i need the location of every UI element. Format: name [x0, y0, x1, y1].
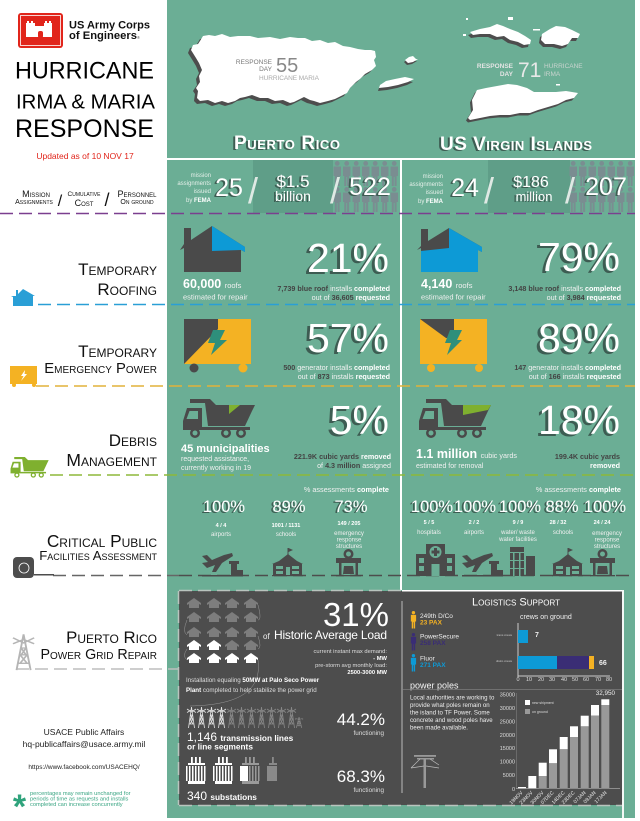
- panel: USVI facilities assessment: 100%: [499, 498, 541, 516]
- section label: Puerto Rico Power Grid Repair: [40, 628, 157, 663]
- section label: Critical Public Facilities Assessment: Facilities Assessment: [39, 548, 158, 563]
- row labels: mission, cost, personnel: On ground: [120, 199, 154, 206]
- panel: USVI debris: 1.1 million cubic yards: [416, 447, 517, 461]
- heading: US Virgin Islands: US Virgin Islands: [440, 134, 592, 155]
- icon: transmission tower: [13, 634, 34, 670]
- panel: USVI facilities assessment: response: [595, 538, 620, 544]
- title: IRMA & MARIA: [16, 90, 155, 114]
- panel: PR roofing: estimated for repair: [183, 292, 248, 302]
- legend: crews: Fluor: [420, 656, 436, 662]
- panel: PR generator: out of 873 installs requested: [298, 372, 390, 381]
- panel: USVI facilities assessment: structures: [594, 544, 620, 550]
- text: power poles description: concrete and wood poles have: [410, 717, 493, 724]
- section label: Temporary Emergency Power: Temporary: [78, 342, 157, 361]
- legend: crews: 23 PAX: [420, 620, 443, 626]
- panel: PR roofing: out of 36,605 requested: [312, 293, 390, 302]
- panel: USVI roofing: [417, 228, 621, 302]
- panel: USVI facilities assessment: 2 / 2: [469, 520, 479, 526]
- stats: Puerto Rico: issued: [194, 189, 211, 195]
- panel: USVI facilities assessment: 88%: [545, 498, 579, 516]
- bar chart: crews on ground: 30: [549, 677, 555, 683]
- bar chart: power poles: 23NOV: [519, 790, 535, 806]
- text: Palo Seco installation: Installation equaling 50MW at Palo Seco Power: [186, 677, 320, 684]
- bar chart: crews on ground: 80: [606, 677, 612, 683]
- stat: transmission lines: 1,146 transmission lines: [187, 730, 294, 744]
- stats: US Virgin Islands: /: [484, 170, 494, 211]
- heading: power poles: power poles: [410, 680, 459, 690]
- text: power poles description: Local authorities are working to: [410, 694, 495, 702]
- panel: PR generator: 500 generator installs completed: [283, 363, 390, 372]
- footnote: periods of time as requests and installs: [30, 796, 128, 802]
- panel: USVI facilities assessment: emergency: [592, 531, 622, 537]
- text: power poles description: [410, 694, 495, 732]
- panel: PR debris: of 4.3 million assigned: [317, 461, 391, 470]
- icon grid: houses with power: [184, 598, 260, 706]
- panel: USVI facilities assessment: % assessments complete: [536, 485, 621, 494]
- panel: USVI facilities assessment: 100%: [454, 498, 496, 516]
- bar chart: power poles: new shipment: [532, 701, 554, 705]
- panel: USVI facilities assessment: hospitals: [417, 530, 441, 536]
- footnote: completed can increase concurrently: [30, 802, 123, 808]
- title: [15, 58, 155, 143]
- panel: PR facilities assessment: 4 / 4: [216, 523, 227, 529]
- panel: USVI facilities assessment: 5 / 5: [424, 520, 434, 526]
- bar chart: crews on ground: crews on ground: [520, 614, 572, 621]
- panel: USVI facilities assessment: 100%: [584, 498, 626, 516]
- stats: Puerto Rico: billion: [275, 188, 311, 204]
- panel: PR facilities assessment: airports: [211, 532, 231, 538]
- panel: PR roofing: [180, 226, 390, 302]
- section label: Debris Management: Management: [66, 450, 158, 470]
- map: Puerto Rico: HURRICANE MARIA: [259, 75, 320, 82]
- icon: utility pole: [411, 755, 439, 788]
- contact block: USACE Public Affairs: [44, 727, 124, 737]
- stat: historic average load: [263, 596, 389, 676]
- legend: crews: PowerSecure: [420, 634, 459, 640]
- map: Puerto Rico: DAY: [259, 66, 273, 73]
- title: RESPONSE: [15, 115, 154, 143]
- bar chart: power poles: [500, 690, 620, 806]
- panel: PR facilities assessment: [202, 485, 389, 576]
- stats: Puerto Rico: 25: [215, 174, 243, 202]
- row labels: mission, cost, personnel: Cost: [75, 198, 94, 208]
- panel: PR debris: 221.9K cubic yards removed: [294, 452, 391, 461]
- panel: USVI debris: [416, 397, 620, 470]
- bar chart: crews on ground: distro crews: [496, 659, 512, 663]
- section label: Temporary Roofing: [78, 260, 157, 299]
- stats: Puerto Rico: /: [330, 170, 340, 211]
- panel: logistics support: [402, 590, 624, 818]
- panel: USVI facilities assessment: 100%: [411, 498, 453, 516]
- panel: USVI generator: 147 generator installs completed: [514, 363, 621, 372]
- panel: USVI facilities assessment: [411, 485, 626, 576]
- panel: PR facilities assessment: 89%: [272, 498, 306, 516]
- row labels: mission, cost, personnel: [15, 189, 157, 210]
- section label: Critical Public Facilities Assessment: Critical Public: [47, 531, 157, 551]
- contact block: https://www.facebook.com/USACEHQ/: [28, 764, 140, 771]
- panel: PR roofing: 60,000 roofs: [183, 277, 242, 291]
- row labels: mission, cost, personnel: /: [58, 193, 63, 210]
- panel: PR roofing: 7,739 blue roof installs completed: [277, 284, 390, 293]
- stats: US Virgin Islands: 207: [585, 173, 627, 201]
- stats: US Virgin Islands: by FEMA: [418, 199, 444, 205]
- stat: historic average load: Historic Average Load: [274, 628, 387, 642]
- bar chart: power poles: 15000: [500, 746, 515, 752]
- bar chart: power poles: 09JAN: [583, 790, 598, 805]
- row labels: mission, cost, personnel: /: [104, 190, 110, 210]
- panel: USVI roofing: out of 3,984 requested: [547, 293, 621, 302]
- panel: USVI facilities assessment: 9 / 9: [513, 520, 523, 526]
- map: Puerto Rico: [188, 34, 418, 106]
- bar chart: power poles: 17JAN: [594, 790, 609, 805]
- stat: historic average load: of: [263, 632, 270, 641]
- icon: tape measure: [13, 557, 54, 578]
- section label: Puerto Rico Power Grid Repair: Puerto Rico: [66, 628, 157, 647]
- legend: crews: 249th D/Co: [420, 613, 453, 620]
- bar chart: power poles: 35000: [500, 692, 515, 698]
- stat: historic average load: 2500-3000 MW: [347, 670, 388, 676]
- map: US Virgin Islands: 71: [518, 59, 541, 82]
- panel: USVI generator: out of 166 installs requested: [529, 372, 621, 381]
- bar chart: power poles: 30NOV: [530, 790, 546, 806]
- row labels: mission, cost, personnel: Mission: [22, 189, 50, 199]
- text: Palo Seco installation: Plant completed to help stabilize the power grid: [186, 687, 317, 694]
- bar chart: crews on ground: 50: [572, 677, 578, 683]
- legend: crews: 258 PAX: [420, 640, 446, 647]
- map: Puerto Rico: 55: [276, 55, 298, 77]
- stat: transmission lines: [187, 710, 385, 752]
- panel: PR roofing: 21%: [307, 235, 389, 281]
- bar chart: power poles: 25000: [500, 720, 515, 726]
- footnote: [13, 788, 131, 821]
- map: US Virgin Islands: RESPONSE: [477, 63, 514, 70]
- map: US Virgin Islands: [463, 17, 583, 122]
- bar chart: power poles: 07DEC: [540, 790, 556, 806]
- panel: USVI debris: 199.4K cubic yards: [555, 452, 620, 461]
- text: power poles description: provide what poles remain on: [410, 702, 490, 709]
- bar chart: power poles: 23DEC: [561, 790, 577, 806]
- stats: Puerto Rico: assignments: [177, 181, 211, 187]
- stats: Puerto Rico: $1.5: [276, 172, 310, 191]
- contact block: [23, 727, 145, 771]
- bar chart: crews on ground: trans crews: [497, 633, 512, 637]
- stats: US Virgin Islands: $186: [513, 174, 549, 191]
- panel: green background: [167, 0, 635, 818]
- panel: USVI roofing: 79%: [538, 234, 620, 280]
- icon: blue house: [11, 289, 35, 306]
- panel: USVI facilities assessment: water/ waste: [500, 530, 535, 536]
- text: power poles description: the island to TF Power. Some: [410, 710, 490, 716]
- map: US Virgin Islands: IRMA: [544, 71, 561, 78]
- map: US Virgin Islands: DAY: [500, 71, 514, 78]
- row labels: mission, cost, personnel: Personnel: [117, 189, 157, 199]
- panel: USVI debris: removed: [590, 461, 620, 470]
- stats: Puerto Rico: mission: [191, 173, 211, 179]
- panel: PR facilities assessment: % assessments complete: [304, 485, 389, 494]
- panel: USVI facilities assessment: airports: [464, 530, 484, 536]
- stats: US Virgin Islands: [409, 160, 634, 213]
- stats: US Virgin Islands: /: [565, 170, 575, 211]
- dashed separators: [0, 214, 635, 669]
- contact block: hq-publicaffairs@usace.army.mil: [23, 739, 145, 749]
- logo: US Army Corps of Engineers: [18, 13, 150, 48]
- bar chart: crews on ground: 10: [526, 677, 532, 683]
- bar chart: crews on ground: 60: [583, 677, 589, 683]
- bar chart: power poles: 07JAN: [573, 790, 588, 805]
- panel: PR facilities assessment: 149 / 205: [338, 521, 360, 527]
- text: Palo Seco installation: [186, 677, 320, 694]
- panel: USVI facilities assessment: 24 / 24: [594, 520, 611, 526]
- bar chart: power poles: 10000: [500, 760, 515, 766]
- bar chart: crews on ground: 66: [599, 660, 607, 667]
- bar chart: power poles: 14DEC: [551, 790, 567, 806]
- stat: substations: 340 substations: [187, 789, 257, 803]
- panel: PR debris: 45 municipalities: [181, 443, 270, 455]
- stats: US Virgin Islands: 24: [451, 174, 479, 202]
- map: Puerto Rico: RESPONSE: [236, 59, 273, 66]
- bar chart: power poles: 0: [512, 787, 515, 793]
- bar chart: crews on ground: 0: [516, 677, 520, 683]
- panel: USVI facilities assessment: water facilities: [498, 537, 537, 543]
- icon row: transmission towers: [187, 707, 303, 728]
- icon: green truck: [11, 457, 49, 478]
- bar chart: crews on ground: 70: [595, 677, 601, 683]
- legend: crews: 271 PAX: [420, 662, 446, 669]
- stat: historic average load: 31%: [323, 596, 389, 633]
- stats: Puerto Rico: by FEMA: [186, 198, 212, 204]
- stat: transmission lines: functioning: [354, 730, 384, 737]
- stat: transmission lines: 44.2%: [337, 710, 385, 729]
- panel: USVI roofing: 3,148 blue roof installs completed: [508, 284, 621, 293]
- section label: Debris Management: Debris: [109, 431, 157, 450]
- panel: logistics support: Logistics Support: [472, 596, 560, 608]
- section label: Temporary Emergency Power: Emergency Power: [44, 361, 157, 377]
- logo: US Army Corps of Engineers: US Army Corps: [69, 20, 150, 32]
- bar chart: power poles: 20000: [500, 733, 515, 739]
- panel: USVI generator: 89%: [538, 315, 620, 361]
- section label: Temporary Roofing: Temporary: [78, 260, 157, 279]
- panel: PR facilities assessment: structures: [336, 544, 362, 550]
- bar chart: power poles: 19NOV: [509, 790, 525, 806]
- bar chart: crews on ground: 40: [561, 677, 567, 683]
- panel: USVI generator: [420, 315, 621, 381]
- heading: Puerto Rico: Puerto Rico: [234, 133, 340, 154]
- panel: USVI roofing: 4,140 roofs: [421, 277, 473, 291]
- panel: PR facilities assessment: response: [337, 538, 362, 544]
- stat: substations: 68.3%: [337, 767, 385, 786]
- section label: Temporary Emergency Power: [44, 342, 157, 377]
- stat: historic average load: - MW: [373, 656, 388, 662]
- panel: USVI facilities assessment: schools: [553, 530, 573, 536]
- bar chart: power poles: 5000: [503, 773, 515, 779]
- divider lines: [167, 158, 635, 590]
- stat: substations: functioning: [354, 787, 384, 794]
- logo: US Army Corps of Engineers: ®: [137, 35, 140, 40]
- section label: Critical Public Facilities Assessment: [39, 531, 158, 563]
- panel: USVI debris: 18%: [538, 397, 620, 443]
- bar chart: power poles: 32,950: [596, 690, 615, 697]
- panel: USVI facilities assessment: 28 / 32: [550, 520, 566, 526]
- icon: generator: [10, 366, 37, 387]
- logo: US Army Corps of Engineers: of Engineers: [69, 30, 137, 42]
- bar chart: power poles: on ground: [532, 710, 548, 714]
- panel: power grid: [178, 590, 622, 806]
- panel: USVI debris: estimated for removal: [416, 463, 484, 470]
- panel: PR facilities assessment: 73%: [334, 498, 368, 516]
- stat: transmission lines: or line segments: [187, 742, 253, 752]
- icon row: substations: [186, 757, 277, 784]
- stat: historic average load: pre-storm avg monthly load:: [315, 663, 387, 669]
- stats: Puerto Rico: [177, 160, 398, 213]
- stat: substations: [187, 767, 385, 803]
- panel: PR debris: currently working in 19: [181, 465, 251, 472]
- stats: US Virgin Islands: assignments: [409, 182, 443, 188]
- panel: PR facilities assessment: 1001 / 1131: [272, 523, 300, 529]
- title: HURRICANE: [15, 58, 154, 84]
- panel: PR facilities assessment: schools: [276, 532, 296, 538]
- stats: Puerto Rico: /: [248, 170, 258, 211]
- legend: crews: [411, 611, 459, 672]
- panel: PR generator: 57%: [307, 315, 389, 361]
- row labels: mission, cost, personnel: Assignments: [15, 199, 54, 206]
- stats: US Virgin Islands: million: [516, 189, 552, 204]
- panel: PR facilities assessment: emergency: [334, 531, 364, 537]
- bar chart: crews on ground: [496, 614, 612, 683]
- panel: PR debris: requested assistance,: [181, 456, 249, 463]
- row labels: mission, cost, personnel: Cumulative: [68, 191, 101, 198]
- map: US Virgin Islands: HURRICANE: [544, 63, 583, 70]
- panel: USVI roofing: estimated for repair: [421, 292, 486, 302]
- panel: PR generator: [184, 315, 390, 381]
- panel: PR facilities assessment: 100%: [203, 498, 245, 516]
- panel: PR debris: [181, 397, 391, 472]
- section label: Debris Management: [66, 431, 158, 470]
- section label: Temporary Roofing: Roofing: [97, 280, 157, 299]
- stats: US Virgin Islands: issued: [426, 190, 443, 196]
- section label: Puerto Rico Power Grid Repair: Power Grid Repair: [40, 647, 157, 663]
- footnote: percentages may remain unchanged for: [30, 791, 131, 797]
- text: power poles description: been made available.: [410, 724, 468, 732]
- update date: Updated as of 10 NOV 17: [36, 151, 134, 161]
- bar chart: power poles: 30000: [500, 706, 515, 712]
- bar chart: crews on ground: 7: [535, 632, 539, 639]
- stat: historic average load: current instant max demand:: [314, 649, 387, 655]
- stats: Puerto Rico: 522: [349, 173, 391, 201]
- bar chart: crews on ground: 20: [538, 677, 544, 683]
- stats: US Virgin Islands: mission: [423, 174, 443, 180]
- icon: utility buildings: [510, 547, 535, 576]
- panel: PR debris: 5%: [330, 397, 389, 443]
